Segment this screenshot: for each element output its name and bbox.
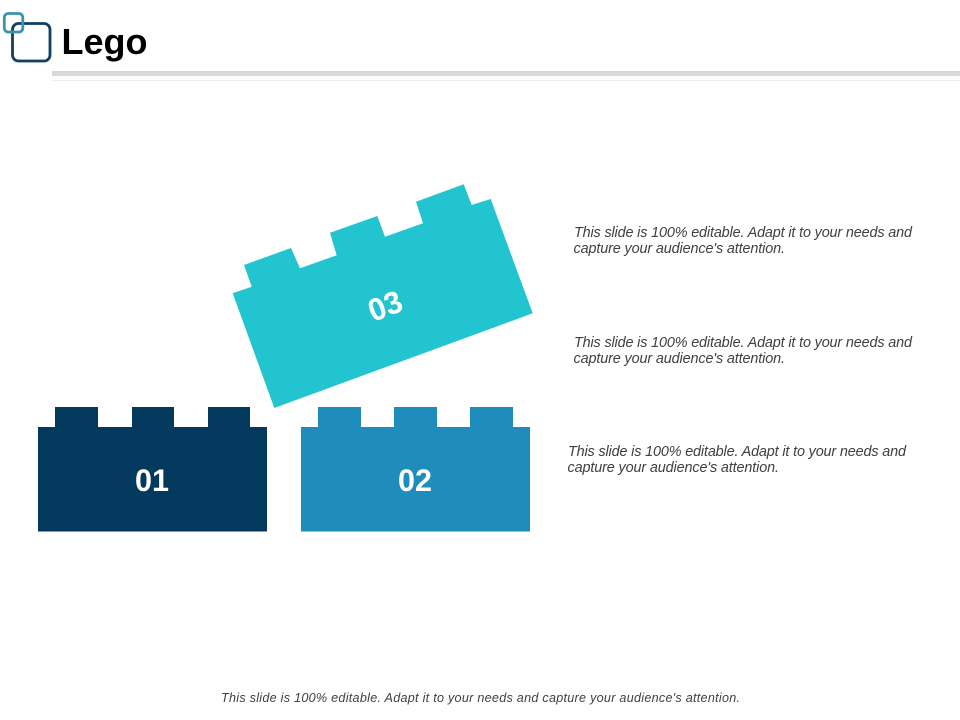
text block: lower: capture your audience's attention. — [568, 460, 779, 476]
text block: lower — [568, 444, 907, 476]
lego brick 02 — [301, 407, 530, 532]
text block: top: capture your audience's attention. — [574, 241, 785, 257]
text block: middle: This slide is 100% editable. Adapt it to your needs and — [574, 335, 913, 351]
header divider — [52, 71, 960, 81]
lego brick 01: 01 — [135, 463, 169, 498]
text block: top — [574, 225, 913, 257]
lego brick 01 — [38, 407, 267, 532]
title: Lego — [62, 21, 148, 62]
text block: lower: This slide is 100% editable. Adapt it to your needs and — [568, 444, 907, 460]
footer note: This slide is 100% editable. Adapt it to your needs and capture your audience's attention. — [221, 691, 740, 705]
lego brick 03: 03 — [363, 283, 407, 329]
lego brick 02: 02 — [398, 463, 432, 498]
text block: middle — [574, 335, 913, 367]
text block: top: This slide is 100% editable. Adapt it to your needs and — [574, 225, 913, 241]
text block: middle: capture your audience's attention. — [574, 351, 785, 367]
icon: overlapping rounded squares — [4, 14, 50, 61]
lego brick 03 — [233, 184, 533, 408]
